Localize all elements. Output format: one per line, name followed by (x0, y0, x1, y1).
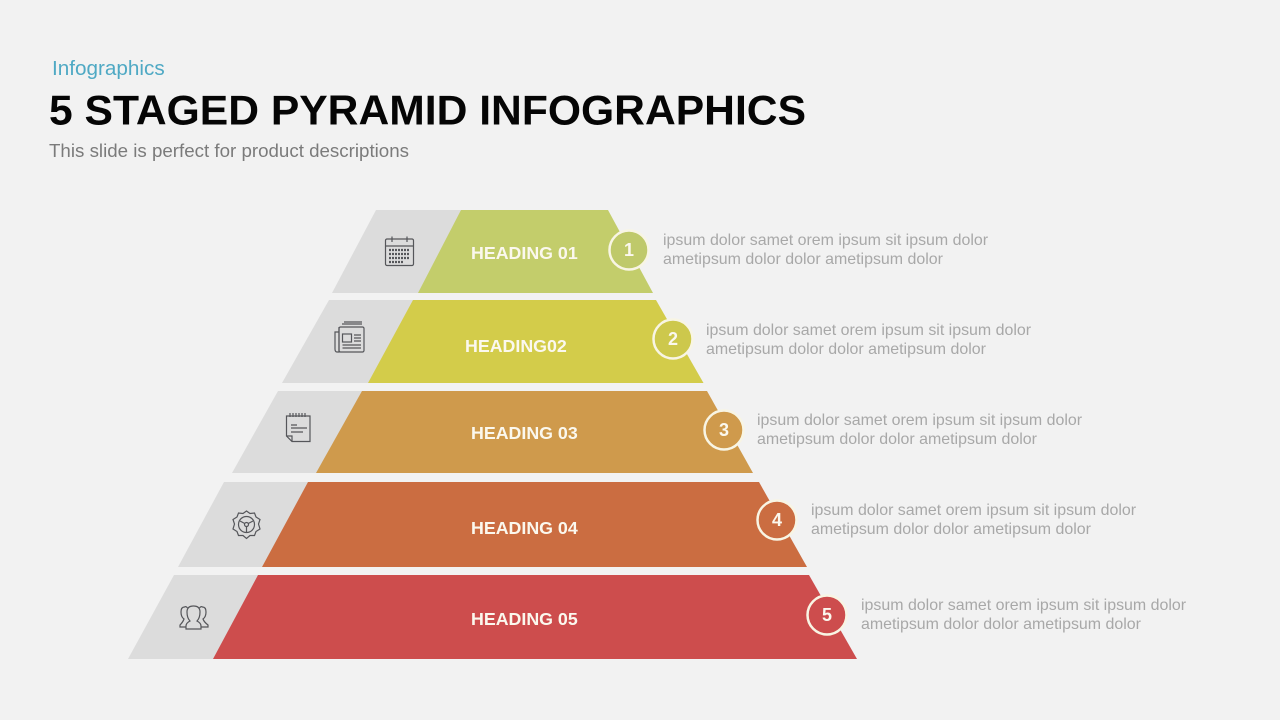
subtitle: This slide is perfect for product descriptions (49, 141, 409, 161)
grey icon panel 3 (232, 391, 363, 473)
icon: newspaper (335, 322, 364, 352)
title: 5 STAGED PYRAMID INFOGRAPHICS (49, 86, 806, 134)
pyramid tier 5 (128, 575, 1187, 659)
description 2 second line: ametipsum dolor dolor ametipsum dolor (706, 341, 987, 358)
description 3: ipsum dolor samet orem ipsum sit ipsum dolor (757, 412, 1083, 429)
heading 2: HEADING02 (465, 336, 567, 356)
number badge 4 (758, 500, 796, 540)
number badge 4: 4 (772, 510, 782, 530)
grey icon panel 1 (332, 210, 462, 293)
coloured band 5 (213, 575, 857, 659)
number badge 5: 5 (822, 605, 832, 625)
pyramid tier 4 (178, 482, 1137, 567)
description 1 second line: ametipsum dolor dolor ametipsum dolor (663, 251, 944, 268)
description 4: ipsum dolor samet orem ipsum sit ipsum dolor (811, 502, 1137, 519)
number badge 1 (610, 230, 648, 270)
number badge 2 (654, 320, 692, 358)
icon: notepad (286, 413, 310, 442)
pyramid tier 2 (282, 300, 1032, 383)
description 5 second line: ametipsum dolor dolor ametipsum dolor (861, 616, 1142, 633)
coloured band 4 (262, 482, 807, 567)
heading 5: HEADING 05 (471, 609, 578, 629)
coloured band 1 (418, 210, 653, 293)
description 4 second line: ametipsum dolor dolor ametipsum dolor (811, 521, 1092, 538)
number badge 3 (704, 410, 744, 450)
grey icon panel 5 (128, 575, 259, 659)
heading 1: HEADING 01 (471, 243, 578, 263)
description 5: ipsum dolor samet orem ipsum sit ipsum dolor (861, 597, 1187, 614)
heading 4: HEADING 04 (471, 518, 578, 538)
number badge 1: 1 (624, 240, 634, 260)
number badge 5 (808, 596, 846, 634)
icon: people (180, 606, 208, 629)
pyramid tier 3 (232, 391, 1083, 473)
coloured band 3 (316, 391, 753, 473)
pyramid tier 1 (332, 210, 989, 293)
grey icon panel 2 (282, 300, 414, 383)
heading 3: HEADING 03 (471, 423, 578, 443)
number badge 2: 2 (668, 329, 678, 349)
icon: gear with wheel (233, 511, 260, 538)
coloured band 2 (368, 300, 704, 383)
icon: calendar (386, 236, 414, 266)
eyebrow label: Infographics (52, 57, 165, 80)
grey icon panel 4 (178, 482, 309, 567)
description 2: ipsum dolor samet orem ipsum sit ipsum dolor (706, 322, 1032, 339)
description 1: ipsum dolor samet orem ipsum sit ipsum dolor (663, 232, 989, 249)
description 3 second line: ametipsum dolor dolor ametipsum dolor (757, 431, 1038, 448)
number badge 3: 3 (719, 420, 729, 440)
